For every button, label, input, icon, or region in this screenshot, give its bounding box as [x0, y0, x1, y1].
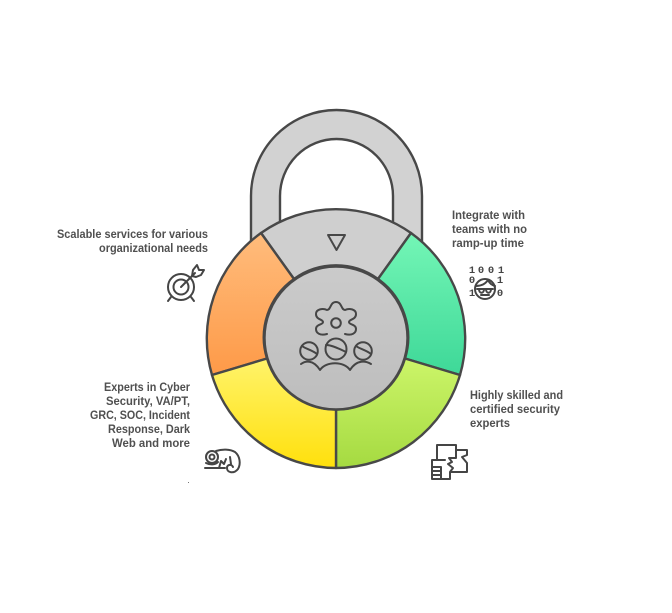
segment: orange: [207, 233, 294, 375]
segment: yellow: [212, 358, 336, 468]
heading text: experts: Security, VA/PT,: [106, 394, 190, 408]
heading text: integrate: ramp-up time: [452, 236, 524, 250]
center circle: [264, 266, 408, 410]
icon: binary digits and coder face: 1: [469, 265, 475, 277]
icon: binary digits and coder face: 1: [469, 288, 475, 300]
heading text: highly skilled: experts: [470, 416, 510, 430]
icon: binary digits and coder face: 0: [488, 265, 494, 277]
padlock shackle: [251, 110, 422, 260]
heading text: scalable services: [57, 227, 208, 255]
heading text: experts: Experts in Cyber: [104, 380, 190, 394]
heading text: integrate: [452, 208, 527, 250]
heading text: integrate: Integrate with: [452, 208, 525, 222]
icon: puzzle pieces: [432, 445, 467, 479]
heading text: highly skilled: certified security: [470, 402, 560, 416]
icon: binary digits and coder face: [469, 265, 504, 300]
padlock body: [207, 209, 465, 468]
segment: grey top with triangle: [261, 209, 411, 279]
heading text: experts: Web and more: [112, 436, 190, 450]
heading text: integrate: teams with no: [452, 222, 527, 236]
icon: gear and team: [300, 302, 372, 370]
heading text: scalable services: Scalable services for various: [57, 227, 208, 241]
icon: binary digits and coder face: 1: [498, 265, 504, 277]
segment: lime: [336, 358, 460, 468]
icon: binary digits and coder face: 1: [497, 275, 503, 287]
icon: target with arrow: [168, 265, 204, 301]
icon: binary digits and coder face: 0: [497, 288, 503, 300]
icon: binary digits and coder face: 0: [469, 275, 475, 287]
heading text: highly skilled: [470, 388, 563, 430]
segment: green: [378, 233, 465, 375]
heading text: highly skilled: Highly skilled and: [470, 388, 563, 402]
icon: chameleon: [205, 450, 240, 472]
heading text: experts: Response, Dark: [108, 422, 190, 436]
heading text: scalable services: organizational needs: [99, 241, 208, 255]
icon: triangle marker: [328, 235, 345, 250]
heading text: experts: GRC, SOC, Incident: [90, 408, 190, 422]
icon: binary digits and coder face: 0: [478, 265, 484, 277]
stray dot: [188, 482, 189, 483]
heading text: experts: [90, 380, 190, 450]
